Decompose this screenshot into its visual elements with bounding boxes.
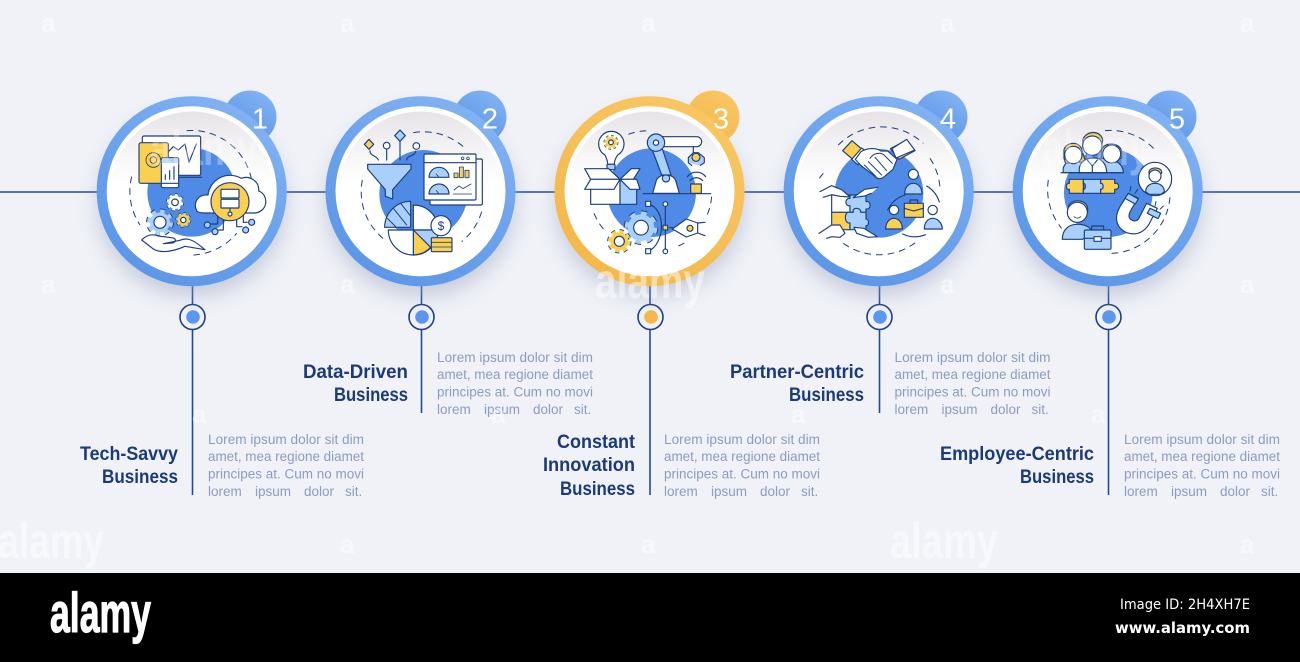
body text 1: principes at. Cum no movi	[208, 466, 364, 482]
heading: Constant Innovation Business: Constant	[557, 432, 636, 453]
heading: Employee-Centric Business: Employee-Centric	[940, 444, 1094, 465]
watermarks: a	[940, 269, 955, 299]
watermarks: a	[41, 8, 56, 38]
body text 3: dolor	[760, 484, 791, 499]
body text 4: ipsum	[942, 402, 978, 417]
circle badge 4: 4	[940, 104, 956, 136]
body text 1: amet, mea regione diamet	[208, 449, 364, 464]
watermarks: alamy	[1042, 120, 1150, 176]
heading: Data-Driven Business: Data-Driven	[303, 362, 408, 383]
circle badge 3: 3	[713, 104, 729, 136]
body text 2: amet, mea regione diamet	[437, 367, 593, 382]
body text 3: sit.	[801, 484, 818, 499]
heading: Data-Driven Business: Business	[334, 385, 408, 406]
step 5: Employee-Centric Business	[940, 90, 1280, 499]
body text 5: sit.	[1261, 484, 1278, 499]
body text 2: sit.	[574, 402, 591, 417]
body text 3: Lorem ipsum dolor sit dim	[664, 432, 820, 447]
body text 1: sit.	[345, 484, 362, 499]
watermarks: a	[1240, 8, 1255, 38]
circle badge 2: 2	[482, 104, 498, 136]
body text 5: Lorem ipsum dolor sit dim	[1124, 432, 1280, 447]
watermarks: a	[641, 8, 656, 38]
watermarks: alamy	[595, 253, 705, 309]
body text 2: Lorem ipsum dolor sit dim	[437, 350, 593, 365]
body text 5: ipsum	[1171, 484, 1207, 499]
body text 3: lorem	[664, 484, 698, 499]
watermarks: a	[1240, 269, 1255, 299]
circle badge 4	[784, 90, 974, 296]
horizontal timeline line	[0, 191, 1300, 193]
circle badge 1	[97, 90, 287, 296]
step 3: Constant Innovation Business	[543, 90, 820, 500]
body text 5: principes at. Cum no movi	[1124, 466, 1280, 482]
watermarks: a	[791, 399, 806, 429]
icon: employees, puzzle, magnet and briefcase	[1048, 130, 1172, 253]
circle badge 5	[1013, 90, 1203, 296]
watermarks: a	[940, 8, 955, 38]
body text 5: lorem	[1124, 484, 1158, 499]
connector line 1	[192, 285, 194, 495]
node 2	[409, 304, 434, 330]
connector line 5	[1108, 285, 1110, 495]
step 4: Partner-Centric Business	[730, 90, 1051, 417]
footer bar	[0, 573, 1300, 662]
body text 1: ipsum	[255, 484, 291, 499]
body text 4	[894, 350, 1051, 417]
heading: Tech-Savvy Business: Business	[102, 467, 178, 488]
connector line 3	[649, 285, 651, 495]
watermarks: a	[1091, 399, 1106, 429]
watermarks: a	[641, 529, 656, 559]
body text 5	[1124, 432, 1280, 499]
heading: Tech-Savvy Business	[80, 444, 178, 488]
icon: technology cloud, gears and devices	[130, 130, 266, 255]
heading: Constant Innovation Business: Business	[560, 479, 635, 500]
body text 5: dolor	[1220, 484, 1251, 499]
circle badge 3	[554, 90, 744, 296]
heading: Partner-Centric Business	[730, 362, 864, 406]
icon: handshake, puzzle and team	[819, 127, 942, 255]
heading: Partner-Centric Business: Partner-Centric	[730, 362, 864, 383]
step 2: Data-Driven Business	[303, 90, 593, 417]
watermarks: alamy	[150, 120, 258, 176]
watermarks: a	[192, 399, 207, 429]
circle badge 1: 1	[252, 104, 268, 136]
body text 2: dolor	[533, 402, 564, 417]
watermarks: a	[340, 8, 355, 38]
connector line 2	[420, 285, 422, 413]
body text 1: lorem	[208, 484, 242, 499]
node 4	[867, 304, 892, 330]
icon: data funnel, dashboard and pie chart	[361, 130, 482, 255]
body text 4: amet, mea regione diamet	[894, 367, 1051, 382]
body text 1	[208, 432, 364, 499]
watermarks: a	[340, 269, 355, 299]
body text 1: Lorem ipsum dolor sit dim	[208, 432, 364, 447]
body text 2: principes at. Cum no movi	[437, 384, 593, 400]
watermarks: a	[41, 269, 56, 299]
node 3	[638, 304, 663, 330]
body text 2: ipsum	[484, 402, 520, 417]
watermarks: alamy	[890, 513, 998, 569]
icon: data funnel, dashboard and pie chart: $	[438, 219, 445, 233]
circle badge 2	[326, 90, 516, 296]
connector line 4	[878, 285, 880, 413]
body text 4: dolor	[990, 402, 1021, 417]
website: www.alamy.com	[1115, 619, 1250, 637]
body text 5: amet, mea regione diamet	[1124, 449, 1280, 464]
node 1	[180, 304, 205, 330]
body text 2	[437, 350, 593, 417]
heading: Employee-Centric Business: Business	[1020, 467, 1094, 488]
body text 3: principes at. Cum no movi	[664, 466, 820, 482]
watermarks: a	[491, 399, 506, 429]
heading: Employee-Centric Business	[940, 444, 1094, 488]
watermarks: a	[1240, 529, 1255, 559]
watermarks: alamy	[0, 513, 104, 569]
body text 3: ipsum	[711, 484, 747, 499]
body text 3: amet, mea regione diamet	[664, 449, 820, 464]
heading: Data-Driven Business	[303, 362, 408, 406]
node 5	[1096, 304, 1121, 330]
watermarks: a	[340, 529, 355, 559]
body text 4: Lorem ipsum dolor sit dim	[894, 350, 1050, 365]
body text 3	[664, 432, 820, 499]
body text 2: lorem	[437, 402, 471, 417]
heading: Constant Innovation Business	[543, 432, 636, 500]
image id: Image ID: 2H4XH7E	[1120, 597, 1250, 613]
body text 4: sit.	[1032, 402, 1049, 417]
icon: innovation bulb, robot arm, box and gears	[585, 131, 712, 254]
footer logo: alamy: alamy	[50, 581, 151, 644]
step 1: Tech-Savvy Business	[80, 90, 364, 499]
heading: Constant Innovation Business: Innovation	[543, 455, 635, 476]
body text 4: principes at. Cum no movi	[894, 384, 1050, 400]
body text 4: lorem	[894, 402, 928, 417]
body text 1: dolor	[304, 484, 335, 499]
circle badge 5: 5	[1169, 104, 1185, 136]
heading: Tech-Savvy Business: Tech-Savvy	[80, 444, 178, 465]
heading: Partner-Centric Business: Business	[789, 385, 864, 406]
